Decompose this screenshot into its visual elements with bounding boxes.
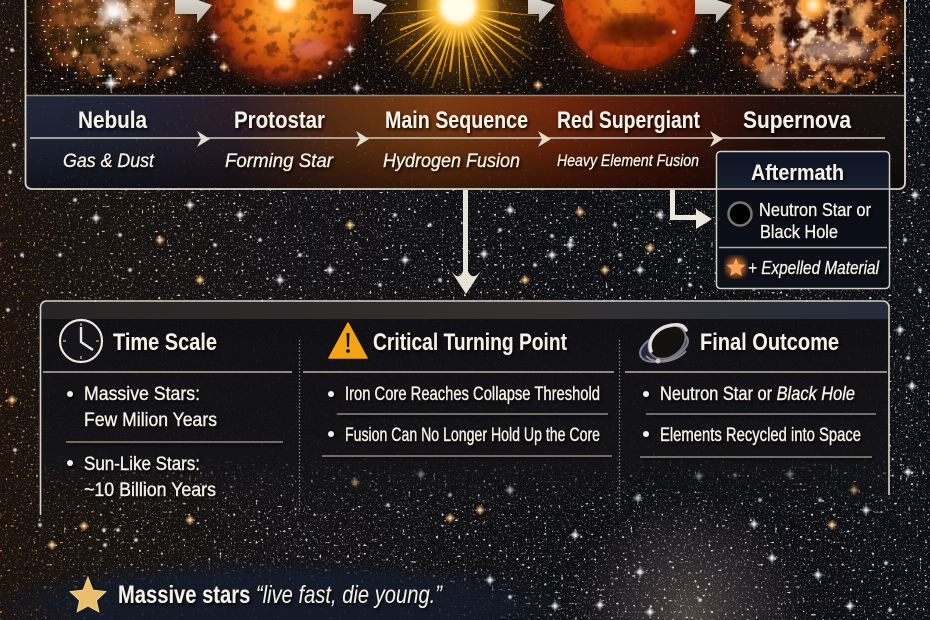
icon: gold star [70, 577, 106, 612]
bullet list: final outcome [640, 384, 876, 457]
stage labels: Red Supergiant [557, 107, 700, 134]
stage labels: Main Sequence [385, 107, 528, 134]
callout: live fast, die young [70, 577, 443, 612]
icon: clock [60, 320, 102, 362]
callout text: Massive stars “live fast, die young.” [118, 581, 443, 609]
icon: warning triangle [329, 323, 367, 358]
aftermath text [748, 160, 880, 278]
panel: stellar life cycle [23, 0, 909, 189]
heading: critical turning point: Critical Turning Point [373, 329, 567, 356]
arrow: protostar to main sequence [353, 0, 387, 23]
icon: orange star [726, 257, 746, 277]
bullet list: critical turning point: Iron Core Reaches Collapse Threshold [345, 384, 600, 405]
icon: black hole ring [636, 318, 692, 368]
stage labels: Hydrogen Fusion [383, 151, 520, 172]
column: final outcome [636, 318, 876, 457]
aftermath text: + Expelled Material [748, 258, 880, 278]
stage strip [26, 96, 904, 189]
heading: time scale: Time Scale [113, 329, 217, 356]
bullet list: critical turning point: Fusion Can No Longer Hold Up the Core [345, 425, 600, 446]
image: red supergiant [533, 0, 702, 90]
bullet list: time scale: Sun-Like Stars: [84, 454, 200, 475]
bullet list: time scale: Few Milion Years [84, 410, 217, 431]
bullet list: time scale [66, 384, 283, 501]
panel: summary [40, 301, 889, 515]
stage labels [63, 107, 852, 172]
bullet list: critical turning point [322, 384, 612, 456]
timeline arrowheads [197, 131, 723, 147]
image: main sequence star [374, 0, 544, 94]
aftermath text: Black Hole [760, 222, 838, 242]
arrow: red supergiant to supernova [695, 0, 732, 23]
aftermath text: Aftermath [751, 160, 844, 185]
image: protostar [198, 0, 366, 94]
stage images [23, 0, 909, 100]
stage labels: Forming Star [225, 151, 334, 172]
aftermath text: Neutron Star or [759, 200, 871, 220]
image: supernova [721, 0, 909, 95]
heading: final outcome: Final Outcome [700, 329, 839, 356]
stage labels: Gas & Dust [63, 151, 155, 172]
arrow: main sequence to red supergiant [528, 0, 555, 23]
panel: aftermath [716, 152, 890, 288]
icon: black hole [728, 202, 752, 226]
column: time scale [60, 320, 283, 501]
arrow: nebula to protostar [175, 0, 212, 23]
bullet list: time scale: ~10 Billion Years [84, 480, 216, 501]
stage labels: Protostar [234, 107, 325, 134]
column: critical turning point [322, 323, 612, 456]
image: nebula [23, 0, 213, 92]
stage labels: Supernova [743, 107, 852, 134]
timeline line [30, 137, 885, 139]
arrow: down to summary panel [451, 190, 481, 294]
stage labels: Heavy Element Fusion [557, 152, 699, 170]
bullet list: final outcome: Elements Recycled into Space [660, 425, 861, 446]
bullet list: final outcome: Neutron Star or Black Hole [660, 384, 855, 405]
stage labels: Nebula [78, 107, 148, 134]
arrow: elbow to aftermath [670, 190, 712, 229]
bullet list: time scale: Massive Stars: [84, 384, 200, 405]
